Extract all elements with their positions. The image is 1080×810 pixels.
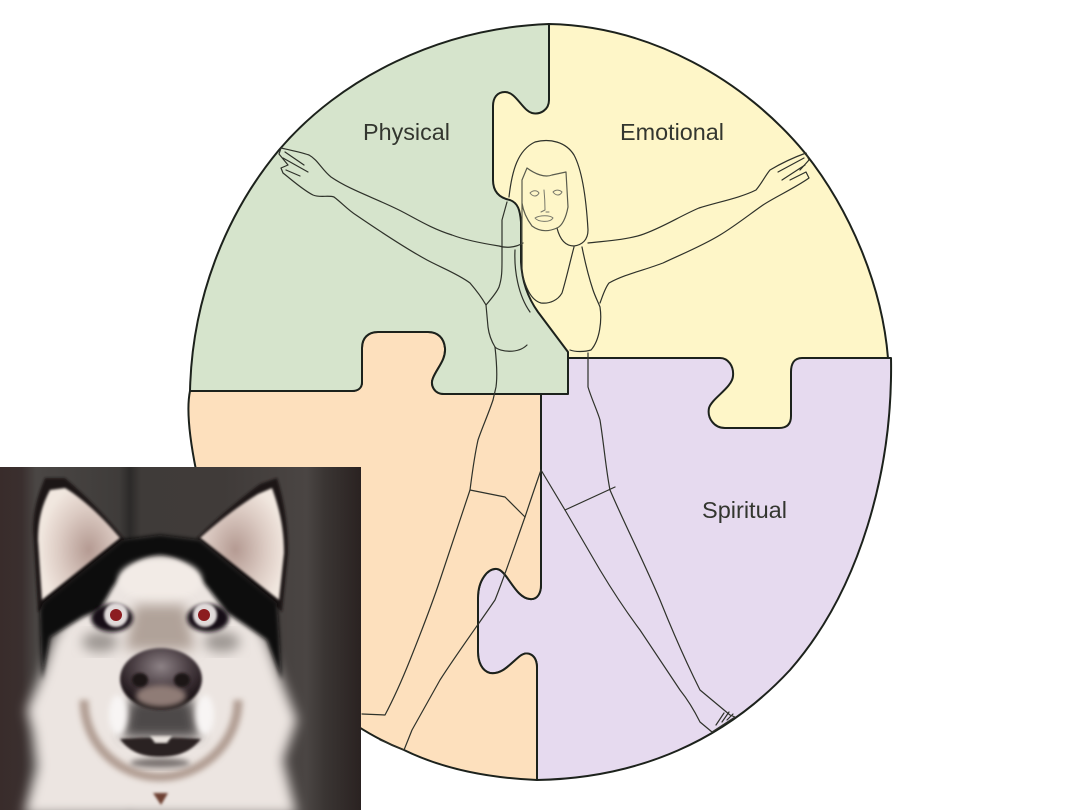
left arm [279,148,523,400]
inner torso [515,250,530,312]
left thigh crease [470,490,525,517]
muzzle [122,698,200,738]
torso [522,245,574,303]
photo background [0,467,361,810]
left eye [91,603,133,632]
right arm [588,153,809,303]
ears [33,478,125,612]
face centre shading [125,605,195,650]
right leg [541,353,735,732]
hair [509,141,588,246]
piece: emotional (yellow) [480,24,888,428]
label: Physical: Physical [363,119,450,145]
dark band over brow [40,535,282,680]
photo: startled husky [0,467,361,810]
muzzle ring [84,700,238,777]
chest and head fur [24,555,297,810]
right thigh crease [565,487,615,510]
under-eye grey fur [82,632,118,652]
puzzle circle [188,24,891,780]
chin shadow [130,758,190,768]
face [522,168,568,245]
toes [716,712,733,725]
left breast [495,345,527,351]
nose [120,648,202,710]
right eye [187,603,229,632]
right hand fingers [778,158,805,180]
muzzle highlights [109,695,127,735]
left hand fingers [283,152,308,176]
mouth [120,736,201,757]
piece: mental (orange) [188,332,541,780]
eyes, nose, mouth [530,190,562,221]
piece: physical (green) [190,24,568,394]
left torso edge [486,202,507,305]
label: Spiritual: Spiritual [702,497,787,523]
forehead patch [114,554,206,586]
piece: spiritual (purple) [478,358,891,780]
left leg [362,400,541,750]
label: Emotional: Emotional [620,119,724,145]
chest mark [153,793,168,805]
figure: line drawing of woman [279,141,809,750]
